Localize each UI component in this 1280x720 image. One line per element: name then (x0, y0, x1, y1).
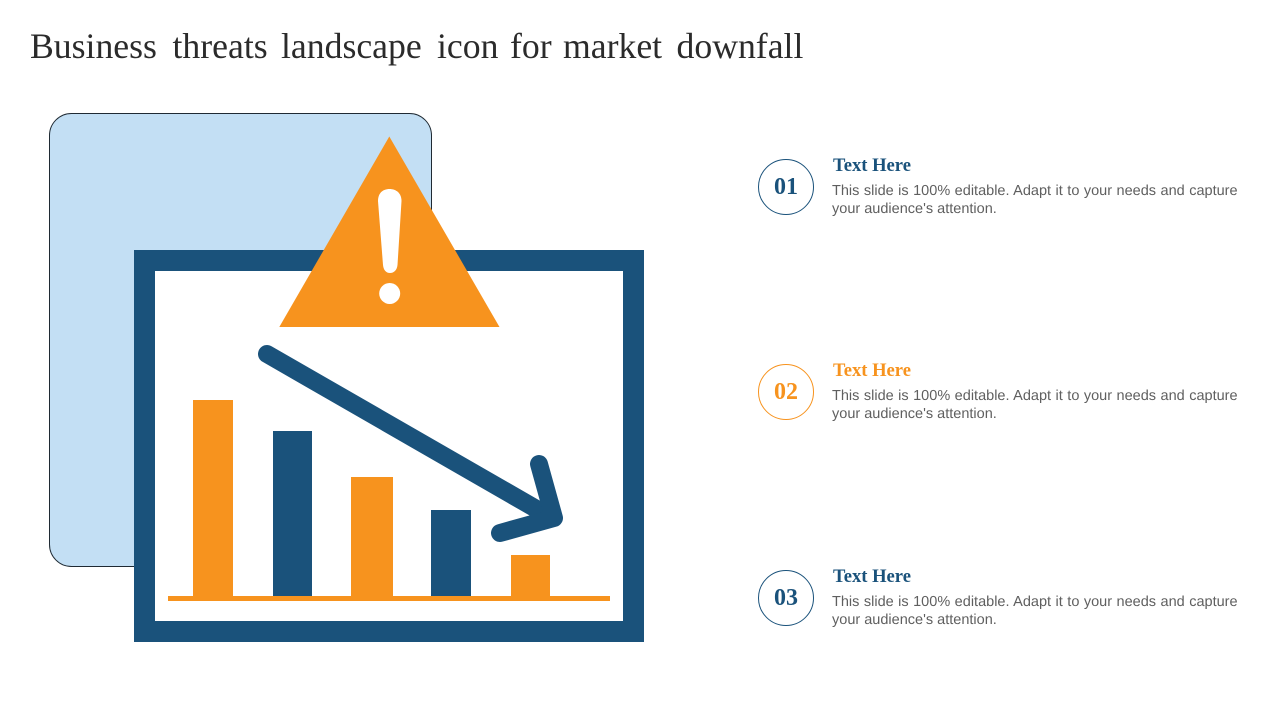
description 02 (832, 388, 1238, 422)
chart frame (144, 260, 634, 632)
description 03 (832, 594, 1238, 628)
heading 03: Text Here (833, 566, 911, 587)
item 01 (758, 155, 1238, 217)
item 02 (758, 360, 1238, 422)
number badge 03 (758, 570, 814, 626)
number badge 01: 01 (774, 174, 798, 200)
bar chart (168, 400, 610, 601)
description 02: This slide is 100% editable. Adapt it to your needs and capture (832, 388, 1238, 404)
heading 01: Text Here (833, 155, 911, 176)
title (30, 26, 803, 66)
description 02: your audience's attention. (832, 406, 997, 422)
title: threats (172, 26, 268, 66)
description 01 (832, 183, 1238, 217)
item 03 (758, 566, 1238, 628)
description 03: This slide is 100% editable. Adapt it to your needs and capture (832, 594, 1238, 610)
description 01: This slide is 100% editable. Adapt it to your needs and capture (832, 183, 1238, 199)
heading 02: Text Here (833, 360, 911, 381)
number badge 01 (758, 159, 814, 215)
title: Business (30, 26, 157, 66)
warning triangle icon (279, 136, 500, 327)
number badge 03: 03 (774, 585, 798, 611)
title: market (563, 26, 662, 66)
number badge 02 (758, 364, 814, 420)
title: icon (437, 26, 498, 66)
description 03: your audience's attention. (832, 612, 997, 628)
title: downfall (676, 26, 803, 66)
number badge 02: 02 (774, 379, 798, 405)
downward arrow (267, 354, 554, 533)
illustration: market downfall warning (49, 113, 644, 642)
light blue backing panel (50, 114, 432, 566)
description 01: your audience's attention. (832, 201, 997, 217)
title: for (510, 26, 552, 66)
title: landscape (281, 26, 422, 66)
